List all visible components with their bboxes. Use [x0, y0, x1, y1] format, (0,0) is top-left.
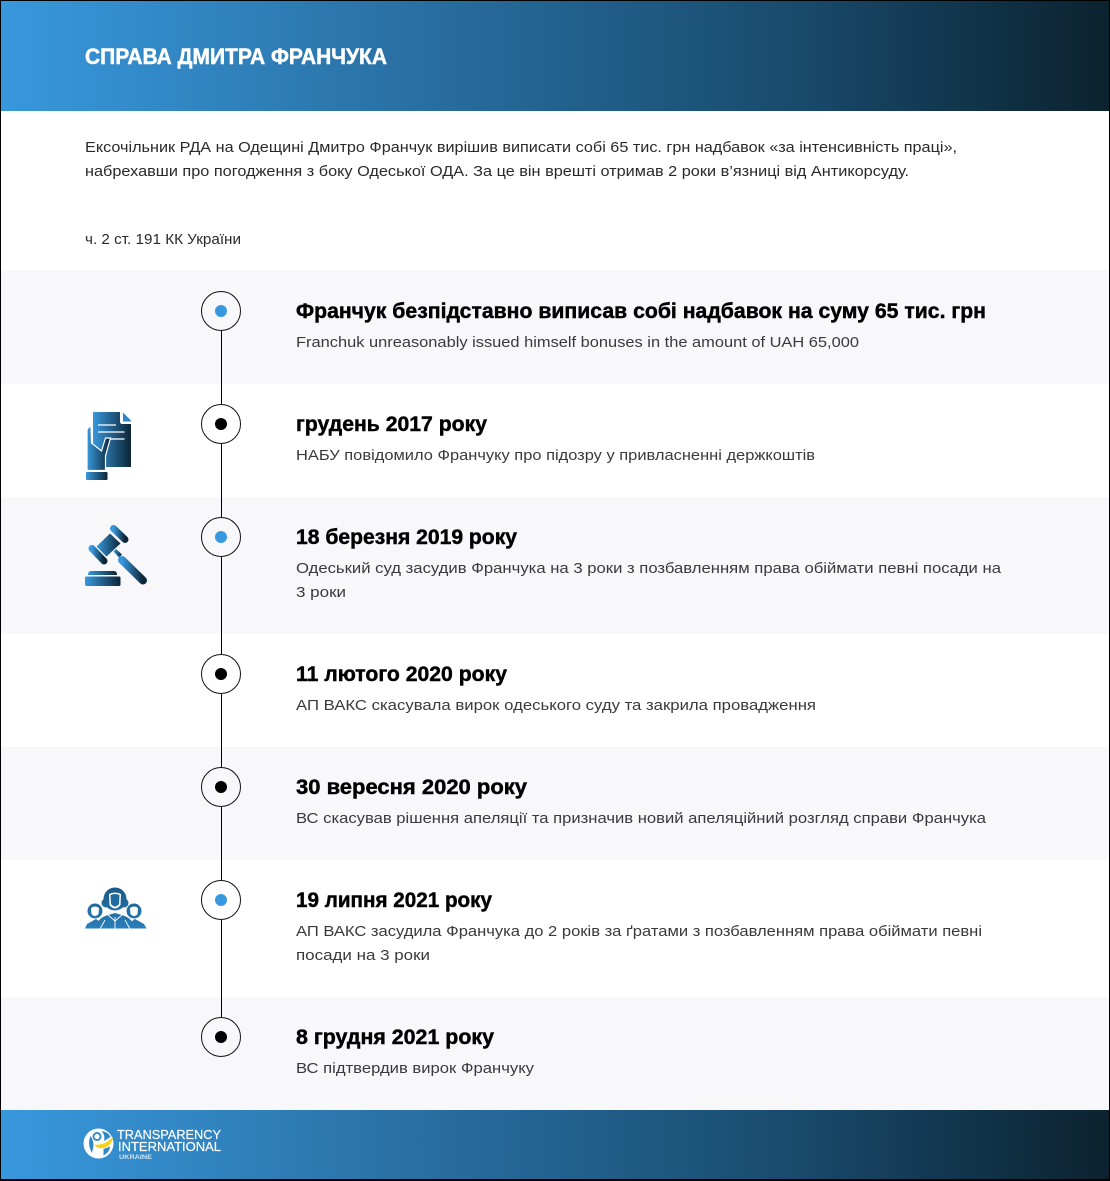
event 1 text [296, 300, 986, 351]
icon: group of judges [85, 888, 146, 929]
timeline marker 7 [202, 1018, 240, 1056]
event 5 text: ВС скасував рішення апеляції та призначив новий апеляційний розгляд справи Франчука [296, 810, 987, 827]
timeline marker 2 [202, 404, 240, 444]
event 4 text [296, 663, 816, 714]
legal reference: ч. 2 ст. 191 КК України [85, 231, 241, 248]
event 7 text: ВС підтвердив вирок Франчуку [296, 1060, 535, 1077]
event 2 text: НАБУ повідомило Франчуку про підозру у привласненні держкоштів [296, 447, 815, 464]
event 4 text: 11 лютого 2020 року [296, 663, 507, 686]
logo: Transparency International Ukraine: TRANSPARENCY [117, 1128, 222, 1142]
logo: Transparency International Ukraine: UKRAINE [119, 1154, 153, 1161]
icon: gavel [85, 528, 143, 586]
timeline marker 6 [202, 880, 240, 920]
event 6 text [296, 889, 982, 964]
event 4 text: АП ВАКС скасувала вирок одеського суду та закрила провадження [296, 697, 816, 714]
event 7 text [296, 1026, 535, 1077]
event 5 text [296, 776, 987, 827]
row backgrounds [1, 270, 1109, 1110]
logo: Transparency International Ukraine: INTERNATIONAL [118, 1140, 221, 1154]
timeline marker 1 [202, 292, 240, 330]
header banner [1, 1, 1109, 111]
event 7 text: 8 грудня 2021 року [296, 1026, 494, 1049]
event 6 text: 19 липня 2021 року [296, 889, 492, 912]
intro text [85, 139, 957, 180]
logo: Transparency International Ukraine [84, 1128, 222, 1161]
timeline line [220, 311, 222, 1037]
event 2 text [296, 413, 815, 464]
event 1 text: Франчук безпідставно виписав собі надбавок на суму 65 тис. грн [296, 300, 986, 323]
footer banner [1, 1110, 1109, 1179]
event 6 text: АП ВАКС засудила Франчука до 2 років за ґратами з позбавленням права обіймати певні [296, 923, 982, 940]
event 5 text: 30 вересня 2020 року [296, 776, 527, 799]
icon: document in hand [86, 412, 131, 480]
event 1 text: Franchuk unreasonably issued himself bonuses in the amount of UAH 65,000 [296, 334, 859, 351]
timeline marker 4 [202, 654, 240, 694]
event 3 text: 3 роки [296, 584, 346, 601]
event 3 text: 18 березня 2019 року [296, 526, 517, 549]
timeline marker 5 [202, 768, 240, 806]
intro text: Ексочільник РДА на Одещині Дмитро Франчук вирішив виписати собі 65 тис. грн надбавок «за інтенсивність праці», [85, 139, 957, 156]
event 6 text: посади на 3 роки [296, 947, 430, 964]
event 3 text: Одеський суд засудив Франчука на 3 роки з позбавленням права обіймати певні посади на [296, 560, 1002, 577]
title: СПРАВА ДМИТРА ФРАНЧУКА [85, 44, 387, 69]
intro text: набрехавши про погодження з боку Одеської ОДА. За це він врешті отримав 2 роки в’язниці від Антикорсуду. [85, 163, 909, 180]
timeline marker 3 [202, 518, 240, 556]
event 3 text [296, 526, 1002, 601]
event 2 text: грудень 2017 року [296, 413, 487, 436]
